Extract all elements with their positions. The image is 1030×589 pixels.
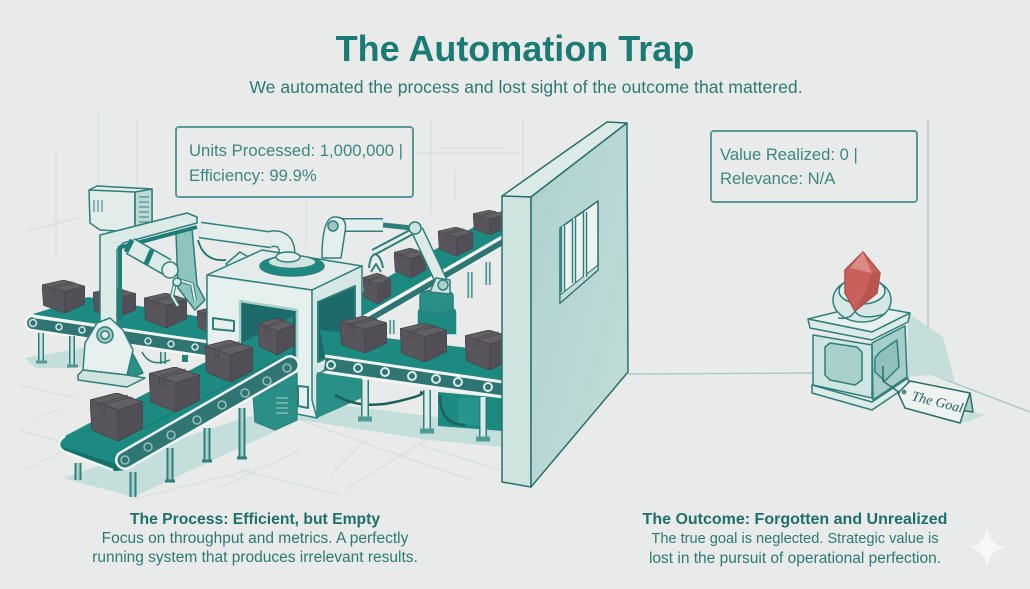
front conveyor boxes xyxy=(90,318,295,441)
window with bars xyxy=(560,201,598,303)
right front conveyor xyxy=(320,330,503,439)
callout: outcome metrics: Relevance: N/A xyxy=(720,169,835,188)
goal tag xyxy=(883,366,985,424)
callout: outcome metrics: Value Realized: 0 | xyxy=(720,145,858,164)
back left boxes xyxy=(42,280,227,334)
caption: the outcome: The Outcome: Forgotten and Unrealized xyxy=(643,511,947,528)
background: factory wall and floor lines xyxy=(20,112,523,500)
caption: the process xyxy=(92,511,418,566)
right front boxes xyxy=(340,316,512,370)
caption: the process: running system that produces irrelevant results. xyxy=(92,549,418,566)
arm pedestal xyxy=(78,318,145,387)
callout: process metrics: Efficiency: 99.9% xyxy=(189,166,317,185)
callout: process metrics: Units Processed: 1,000,000 | xyxy=(189,141,403,160)
title: The Automation Trap xyxy=(336,28,694,69)
motor beside machine xyxy=(253,385,297,430)
floor shadows under machinery xyxy=(25,345,502,497)
right rear boxes xyxy=(363,210,505,304)
right robot arm xyxy=(322,217,457,335)
right rear conveyor xyxy=(362,210,503,334)
goal pedestal with gem xyxy=(808,252,955,410)
goal tag label: The Goal xyxy=(910,389,965,417)
callout: process metrics xyxy=(175,126,414,198)
caption: the process: The Process: Efficient, but Empty xyxy=(130,511,380,528)
gantry robot arm xyxy=(100,213,287,335)
central machine xyxy=(207,250,362,418)
caption: the outcome xyxy=(642,511,947,567)
caption: the outcome: The true goal is neglected. Strategic value is xyxy=(651,531,939,547)
caption: the process: Focus on throughput and metrics. A perfectly xyxy=(102,530,408,547)
subtitle: We automated the process and lost sight of the outcome that mattered. xyxy=(249,77,803,97)
front conveyor xyxy=(58,316,293,497)
ruby gem xyxy=(845,252,880,311)
callout: outcome metrics xyxy=(710,130,918,203)
caption: the outcome: lost in the pursuit of operational perfection. xyxy=(649,550,941,567)
back left conveyor xyxy=(30,297,207,366)
sparkle xyxy=(967,527,1006,568)
foreground wall with barred window xyxy=(502,122,628,487)
control panel xyxy=(89,186,152,232)
right room lines xyxy=(628,120,1030,412)
